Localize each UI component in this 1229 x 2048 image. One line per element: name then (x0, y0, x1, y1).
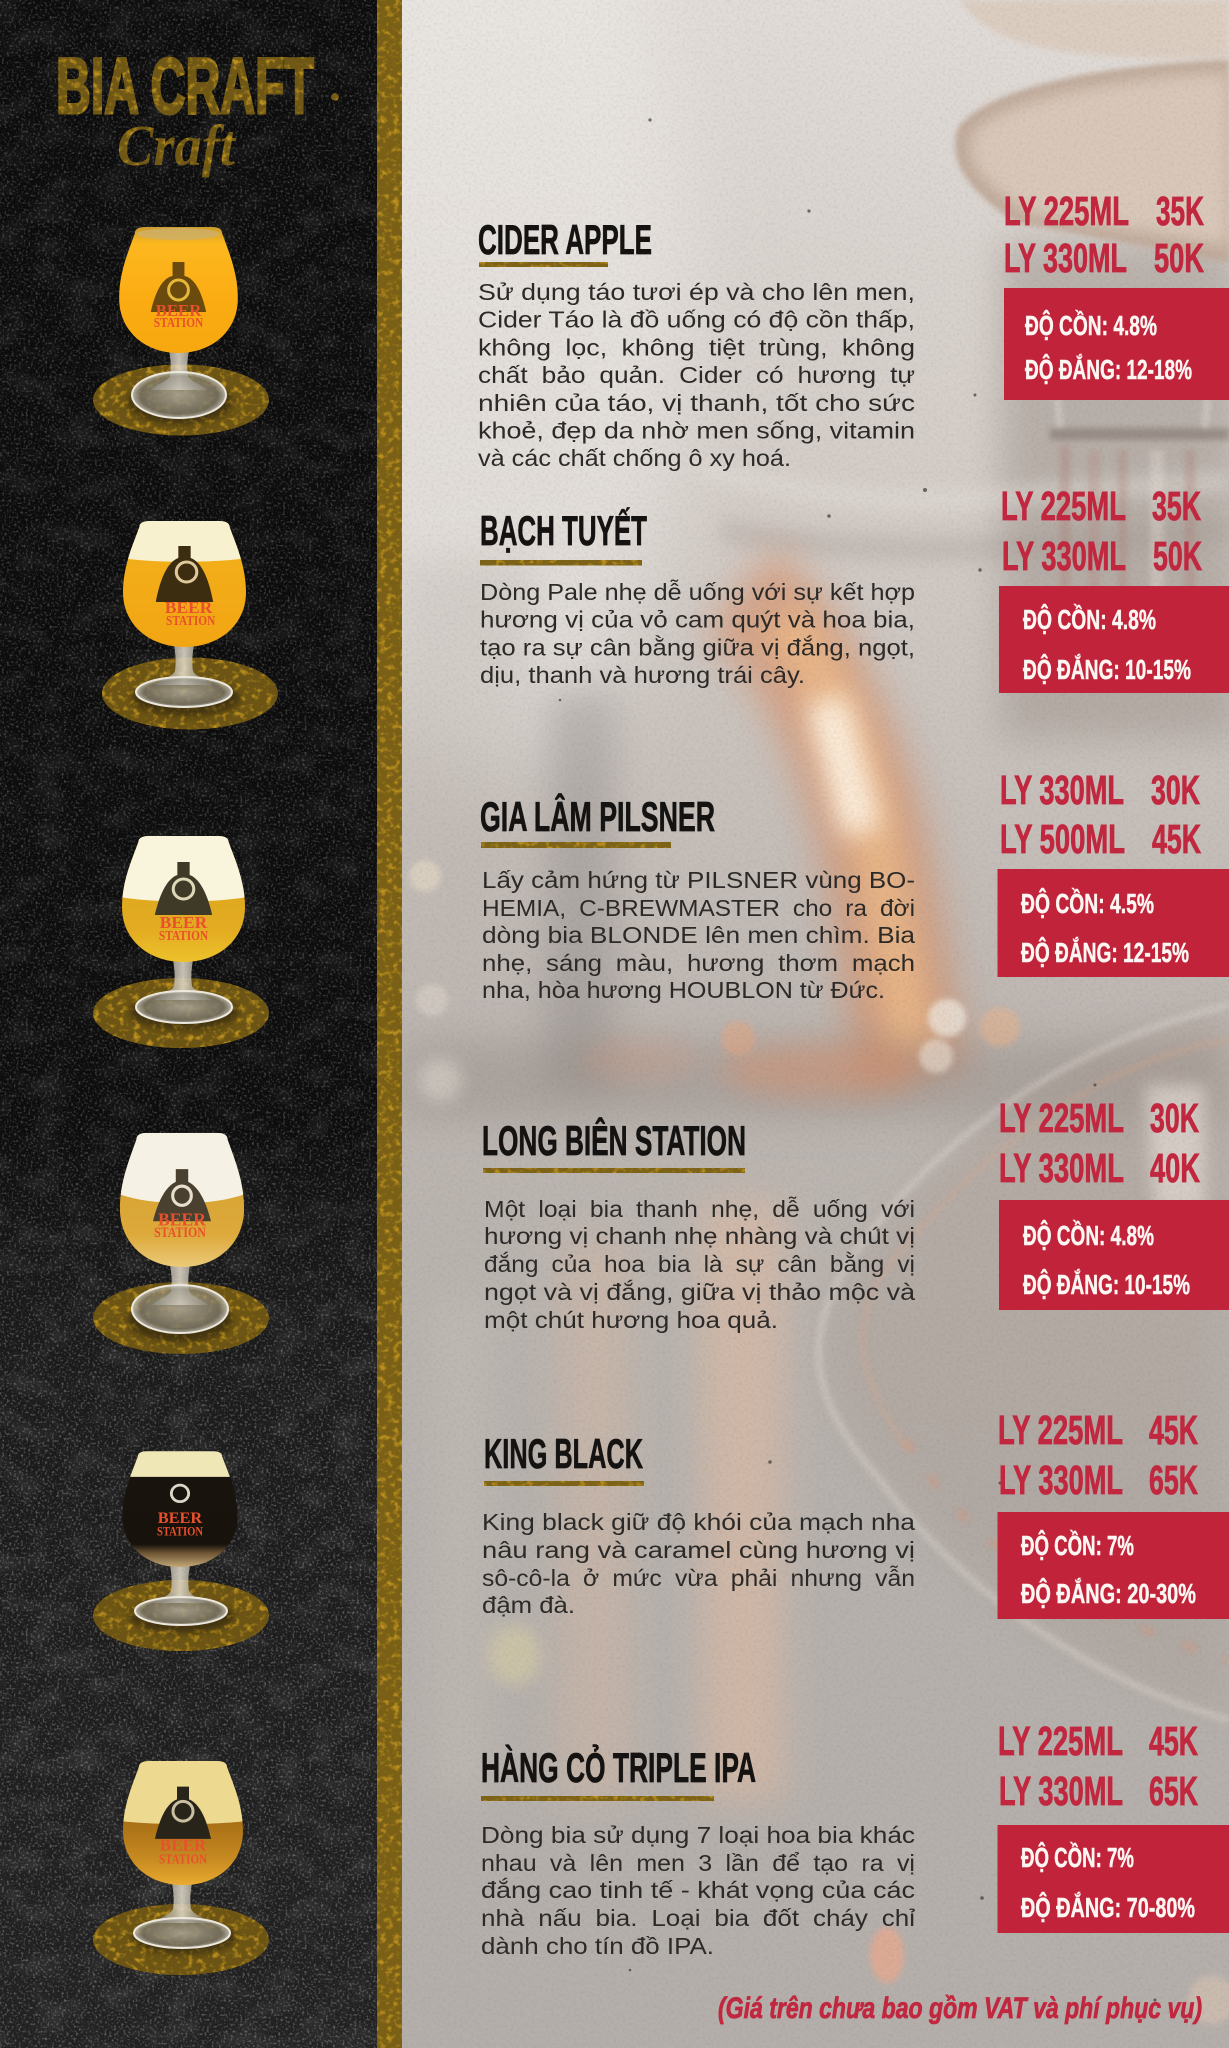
spec box (999, 586, 1229, 693)
description: và các chất chống ô xy hoá. (478, 445, 791, 471)
description: đậm đà. (482, 1592, 575, 1618)
title: Bia Craft: Craft (117, 113, 237, 178)
prices: 35K (1156, 188, 1204, 234)
underline (480, 560, 642, 566)
description: nhà nấu bia. Loại bia đốt cháy chỉ (481, 1905, 916, 1931)
prices: LY 330ML (999, 1457, 1123, 1503)
glass 4: long bien station (93, 1132, 269, 1354)
section: king black (482, 1407, 1229, 1619)
prices: 50K (1153, 533, 1202, 579)
spec box: ĐỘ CỒN: 4.8% (1025, 309, 1157, 341)
prices: LY 225ML (999, 1095, 1124, 1141)
description: Một loại bia thanh nhẹ, dễ uống với (484, 1196, 915, 1222)
glass 6: hang co triple ipa (93, 1760, 269, 1975)
spec box: ĐỘ CỒN: 7% (1021, 1529, 1134, 1561)
description: Dòng Pale nhẹ dễ uống với sự kết hợp (480, 579, 915, 605)
underline (479, 262, 608, 267)
heading: long bien station: LONG BIÊN STATION (482, 1116, 746, 1164)
description (482, 867, 916, 1003)
description (484, 1196, 916, 1333)
prices: LY 330ML (999, 1768, 1123, 1814)
prices: 30K (1150, 1095, 1199, 1141)
description: nhiên của táo, vị thanh, tốt cho sức (478, 390, 915, 416)
prices (998, 1718, 1198, 1814)
underline (481, 842, 671, 848)
prices: LY 500ML (1000, 816, 1125, 862)
prices: 65K (1149, 1768, 1198, 1814)
description: HEMIA, C-BREWMASTER cho ra đời (482, 895, 915, 921)
glass 6: hang co triple ipa: STATION (159, 1853, 207, 1867)
description: một chút hương hoa quả. (484, 1307, 778, 1333)
spec box: ĐỘ CỒN: 4.8% (1023, 603, 1156, 635)
prices: LY 330ML (1000, 767, 1124, 813)
prices (999, 1095, 1200, 1191)
prices: 40K (1150, 1145, 1200, 1191)
description: dịu, thanh và hương trái cây. (480, 662, 805, 688)
glass 5: king black: STATION (157, 1524, 203, 1539)
glass 2: bach tuyet (102, 520, 278, 730)
prices: LY 225ML (998, 1718, 1123, 1764)
description: đắng của hoa bia là sự cân bằng vị (484, 1251, 915, 1277)
glass 5: king black: BEER (158, 1510, 203, 1527)
description: nhẹ, sáng màu, hương thơm mạch (482, 950, 915, 976)
description (482, 1509, 916, 1618)
spec box: ĐỘ CỒN: 7% (1021, 1841, 1134, 1873)
title: Bia Craft: BIA CRAFT (56, 41, 314, 130)
description: khoẻ, đẹp da nhờ men sống, vitamin (478, 418, 915, 444)
description: dành cho tín đồ IPA. (481, 1933, 714, 1959)
prices: LY 330ML (1002, 533, 1126, 579)
prices: LY 330ML (1004, 235, 1127, 281)
spec box: ĐỘ CỒN: 4.5% (1021, 887, 1154, 919)
description: nhau và lên men 3 lần để tạo ra vị (481, 1850, 915, 1876)
glass 4: long bien station: BEER (158, 1209, 207, 1230)
glass 6: hang co triple ipa: BEER (160, 1836, 207, 1855)
description: chất bảo quản. Cider có hương tự (478, 362, 915, 388)
heading: bach tuyet: BẠCH TUYẾT (480, 507, 647, 554)
section: long bien station (482, 1095, 1229, 1333)
heading: king black: KING BLACK (484, 1430, 643, 1477)
left dark stone panel (0, 0, 378, 2048)
description: đắng cao tinh tế - khát vọng của các (481, 1877, 915, 1903)
prices: LY 225ML (1004, 188, 1129, 234)
description (481, 1822, 916, 1959)
spec box (1004, 288, 1229, 400)
glass 2: bach tuyet: BEER (165, 598, 213, 617)
description: hương vị chanh nhẹ nhàng và chút vị (484, 1223, 915, 1249)
prices: 50K (1154, 235, 1204, 281)
glass 2: bach tuyet: STATION (166, 613, 216, 629)
glass 3: gia lam pilsner (93, 835, 269, 1048)
description: Lấy cảm hứng từ PILSNER vùng BO- (482, 867, 915, 893)
prices: LY 225ML (998, 1407, 1123, 1453)
spec box: ĐỘ CỒN: 4.8% (1023, 1219, 1154, 1251)
description: dòng bia BLONDE lên men chìm. Bia (482, 922, 916, 948)
spec box (999, 1200, 1229, 1310)
glass 3: gia lam pilsner: STATION (159, 928, 209, 944)
spec box (998, 1512, 1229, 1619)
description: nha, hòa hương HOUBLON từ Đức. (482, 977, 885, 1003)
description: King black giữ độ khói của mạch nha (482, 1509, 916, 1535)
description: Cider Táo là đồ uống có độ cồn thấp, (478, 307, 915, 333)
glass 1: cider apple (93, 226, 269, 436)
prices (1000, 767, 1201, 862)
heading: hang co triple ipa: HÀNG CỎ TRIPLE IPA (481, 1743, 756, 1791)
right paper background with blurred bar photo (402, 0, 1229, 2048)
description: ngọt và vị đắng, giữa vị thảo mộc và (484, 1279, 916, 1305)
prices: 65K (1149, 1457, 1198, 1503)
glass 1: cider apple: STATION (154, 316, 203, 331)
description: không lọc, không tiệt trùng, không (478, 334, 915, 360)
description: sô-cô-la ở mức vừa phải nhưng vẫn (482, 1565, 915, 1591)
description (478, 279, 915, 471)
description: Dòng bia sử dụng 7 loại hoa bia khác (481, 1822, 915, 1848)
prices: LY 330ML (999, 1145, 1124, 1191)
title: Bia Craft (56, 41, 339, 178)
section: bach tuyet (480, 483, 1229, 693)
glass 4: long bien station: STATION (154, 1225, 206, 1241)
prices: 45K (1152, 816, 1201, 862)
prices (1004, 188, 1204, 281)
heading: gia lam pilsner: GIA LÂM PILSNER (480, 792, 715, 840)
heading: cider apple: CIDER APPLE (478, 216, 652, 263)
section: hang co triple ipa (481, 1718, 1229, 1959)
section: cider apple (478, 188, 1229, 471)
prices: 35K (1152, 483, 1201, 529)
prices: 30K (1151, 767, 1200, 813)
spec box (998, 869, 1229, 977)
glass 1: cider apple: BEER (156, 301, 202, 320)
underline (481, 1796, 714, 1801)
glass 5: king black (93, 1450, 269, 1651)
prices (1001, 483, 1202, 579)
underline (483, 1168, 745, 1173)
spec box (998, 1825, 1229, 1933)
prices: LY 225ML (1001, 483, 1126, 529)
section: gia lam pilsner (480, 767, 1229, 1003)
underline (484, 1481, 644, 1486)
prices: 45K (1149, 1407, 1198, 1453)
glass 3: gia lam pilsner: BEER (160, 913, 208, 932)
gold vertical stripe (377, 0, 402, 2048)
description (480, 579, 915, 688)
description: hương vị của vỏ cam quýt và hoa bia, (480, 607, 915, 633)
prices: 45K (1149, 1718, 1198, 1764)
prices (998, 1407, 1198, 1503)
description: Sử dụng táo tươi ép và cho lên men, (478, 279, 915, 305)
description: nâu rang và caramel cùng hương vị (482, 1537, 915, 1563)
description: tạo ra sự cân bằng giữa vị đắng, ngọt, (480, 635, 915, 661)
